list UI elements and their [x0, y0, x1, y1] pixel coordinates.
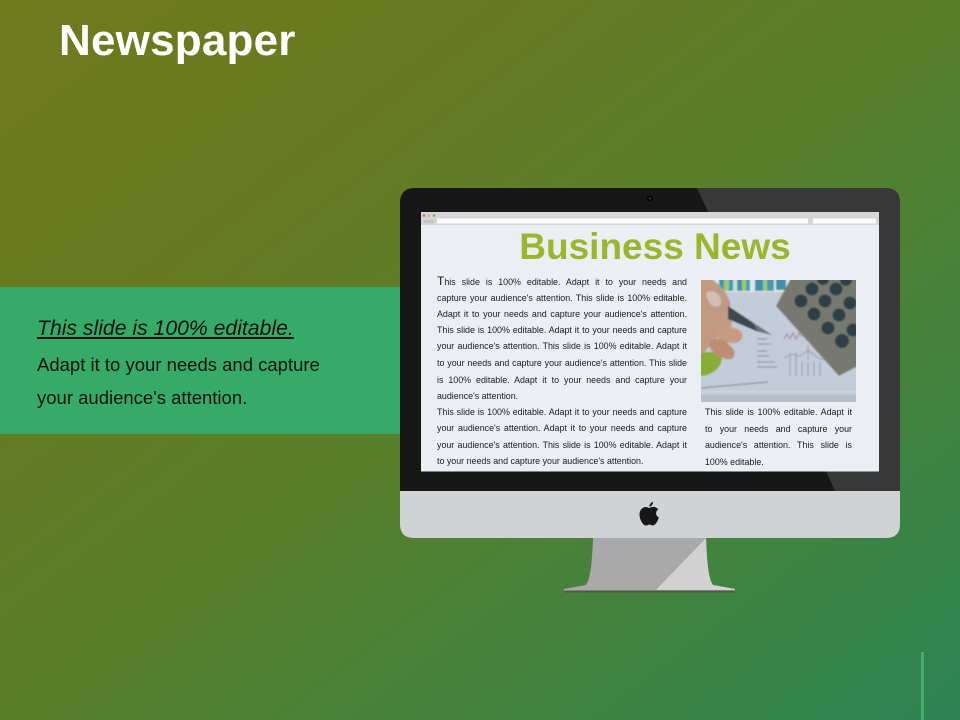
text block: photo caption column: [705, 407, 852, 467]
text block: main article column: your audience's attention. Adapt it to your needs and capture: [437, 423, 687, 433]
browser toolbar: [421, 212, 879, 225]
screen: [421, 212, 879, 472]
band heading: This slide is 100% editable.: [37, 317, 294, 340]
calculator: [776, 278, 858, 376]
band body text: [37, 354, 320, 408]
band body text: Adapt it to your needs and capture: [37, 354, 320, 375]
text block: photo caption column: This slide is 100% editable. Adapt it: [705, 407, 852, 417]
monitor stand: [564, 538, 735, 592]
paper chart marks: [701, 332, 825, 389]
text block: main article column: audience's attention.: [437, 391, 518, 401]
icon: apple logo: [640, 502, 659, 526]
text block: main article column: to your needs and capture your audience's attention. This slide: [437, 358, 687, 368]
hand: [699, 278, 732, 354]
band body text: your audience's attention.: [37, 387, 247, 408]
title: Newspaper: [59, 16, 296, 65]
text block: main article column: your audience's attention. This slide is 100% editable. Adapt it: [437, 341, 687, 351]
text block: main article column: to your needs and capture your audience's attention.: [437, 456, 643, 466]
white paper top: [714, 280, 790, 292]
text block: photo caption column: audience's attention. This slide is: [705, 440, 852, 450]
fingers: [716, 327, 742, 343]
text block: main article column: your audience's attention. This slide is 100% editable. Adapt it: [437, 440, 687, 450]
text block: main article column: capture your audience's attention. This slide is 100% editable.: [437, 293, 687, 303]
text block: main article column: Adapt it to your needs and capture your audience's attention.: [437, 309, 687, 319]
heading: Business News: Business News: [519, 226, 791, 267]
icon: desktop monitor: [400, 188, 900, 592]
pen: [728, 306, 772, 335]
text block: photo caption column: to your needs and capture your: [705, 424, 852, 434]
colour chart strip: [719, 278, 786, 291]
text block: main article column: [437, 274, 687, 466]
green chart circle: [699, 352, 722, 376]
accent line: [921, 652, 924, 720]
webcam: [647, 196, 653, 202]
text block: main article column: This slide is 100% editable. Adapt it to your needs and capture: [437, 407, 687, 417]
monitor chin: [400, 491, 900, 538]
text block: main article column: This slide is 100% editable. Adapt it to your needs and capture: [437, 325, 687, 335]
text block: main article column: This slide is 100% editable. Adapt it to your needs and: [437, 274, 687, 288]
text block: main article column: is 100% editable. Adapt it to your needs and capture your: [437, 375, 687, 385]
news photo: hand, pen and calculator: [701, 280, 856, 402]
monitor bezel: [400, 188, 900, 491]
panel: editable text band: [0, 287, 400, 434]
text block: photo caption column: 100% editable.: [705, 457, 764, 467]
